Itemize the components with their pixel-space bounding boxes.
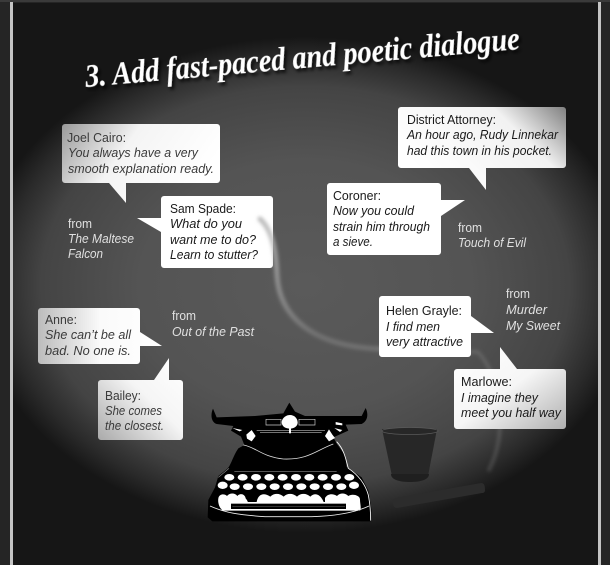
bubble: District Attorney [398,107,566,190]
source: Touch of Evil: Touch of Evil [458,236,527,250]
bubble: Joel Cairo [62,124,220,203]
icon: cigarette [393,483,485,508]
bubble: Joel Cairo: You always have a very [68,146,199,160]
bubble: Marlowe: I imagine they [461,391,539,405]
bubble: Helen Grayle: very attractive [386,335,463,349]
bubble: Joel Cairo: smooth explanation ready. [68,162,214,176]
source: Murder My Sweet [506,287,561,333]
bubble: Anne [38,308,162,364]
bubble: Sam Spade: want me to do? [170,233,256,247]
source: The Maltese Falcon: The Maltese [68,232,134,246]
source: Touch of Evil [458,221,527,250]
source: Out of the Past [172,309,255,339]
bubble: Coroner: Now you could [333,204,415,218]
bubble: Helen Grayle: Helen Grayle: [386,304,462,318]
source: Out of the Past: Out of the Past [172,325,255,339]
bubble: Anne: bad. No one is. [45,344,131,358]
bubble: Helen Grayle [379,296,494,357]
source: Murder My Sweet: from [506,287,530,301]
bubble: District Attorney: had this town in his pocket. [407,144,552,158]
bubble: Coroner [327,183,465,255]
bubble: Sam Spade: Learn to stutter? [170,248,258,262]
icon: cup [382,428,438,482]
bubble: Bailey: the closest. [105,419,164,433]
source: Touch of Evil: from [458,221,482,235]
bubble: Marlowe [454,347,566,429]
source: The Maltese Falcon: Falcon [68,247,103,261]
icon: typewriter [208,403,372,521]
bubble: District Attorney: An hour ago, Rudy Linnekar [406,128,559,142]
bubble: Bailey: She comes [105,404,162,418]
bubble: Joel Cairo: Joel Cairo: [67,131,126,145]
bubble: Sam Spade [137,196,273,268]
source: Murder My Sweet: My Sweet [506,319,561,333]
bubble: Marlowe: Marlowe: [461,375,512,389]
bubble: Coroner: strain him through [333,220,430,234]
bubble: Helen Grayle: I find men [386,320,440,334]
bubble: Marlowe: meet you half way [461,406,562,420]
source: The Maltese Falcon: from [68,217,92,231]
bubble: Coroner: a sieve. [333,235,373,249]
bubble: Bailey [98,358,183,440]
bubble: Anne: Anne: [45,313,77,327]
source: The Maltese Falcon [68,217,134,261]
bubble: Anne: She can’t be all [45,328,132,342]
title: 3. Add fast-paced and poetic dialogue [83,21,521,95]
bubble: Coroner: Coroner: [333,189,381,203]
bubble: Sam Spade: Sam Spade: [170,202,236,216]
bubble: Sam Spade: What do you [170,217,242,231]
source: Murder My Sweet: Murder [506,303,548,317]
source: Out of the Past: from [172,309,196,323]
smoke trail [260,219,500,470]
bubble: Bailey: Bailey: [105,389,141,403]
bubble: District Attorney: District Attorney: [407,113,496,127]
